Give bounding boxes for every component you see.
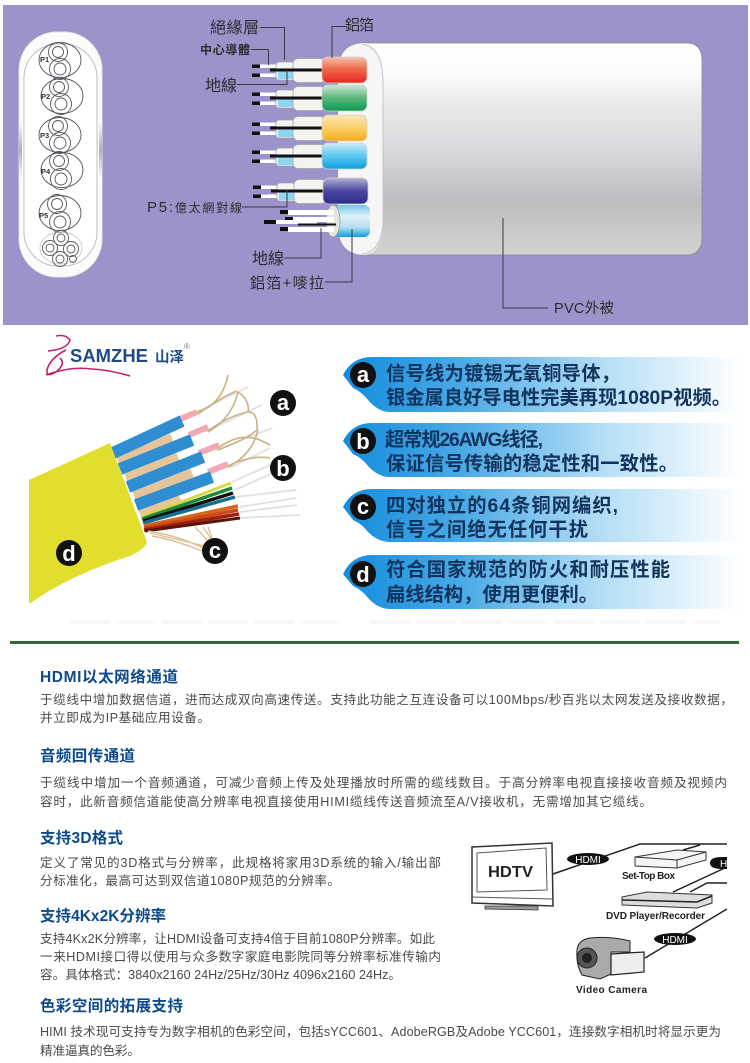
feature callout a: 银金属良好导电性完美再现1080P视频。 (386, 386, 731, 409)
HDMI device connection diagram (472, 843, 727, 996)
section: audio return channel: 于缆线中增加一个音频通道，可减少音频上传及处理播放时所需的缆线数目。于高分辨率电视直接接收音频及视频内 (40, 775, 727, 790)
HDMI badge 3 (654, 933, 696, 946)
wire pair: yellow (252, 115, 367, 141)
badge markers on cable: a (277, 390, 290, 415)
callout labels: P5:億太網對線 (147, 199, 242, 216)
cross-section capsule: P4 (41, 167, 51, 176)
badge markers on cable: b (276, 456, 290, 481)
callout labels: 鋁箔 (345, 17, 374, 34)
callout labels: 絕緣層 (210, 19, 259, 37)
wire pair: blue (252, 143, 367, 169)
cables (553, 844, 727, 958)
section: 4K x 2K resolution: 支持4Kx2K分辨率，让HDMI设备可支持4倍于目前1080P分辨率。如此 (40, 931, 435, 946)
HDMI badge 3: HDMI (662, 935, 688, 946)
bare white conductors (190, 387, 300, 518)
callout labels: 地線 (205, 77, 237, 95)
flat cable illustration (29, 375, 300, 604)
feature callout d: 扁线结构，使用更便利。 (386, 584, 598, 606)
HDMI badge 1 (567, 853, 609, 866)
feature callout d: 符合国家规范的防火和耐压性能 (386, 558, 670, 581)
section: audio return channel: 容时，此新音频信道能使高分辨率电视直接使用HIMI缆线传送音频流至A/V接收机，无需增加其它缆线。 (40, 794, 652, 809)
HDTV: HDTV (488, 864, 533, 881)
wire pair: red (252, 57, 367, 83)
wire pair: purple ethernet (253, 178, 368, 204)
feature callout d (343, 555, 742, 609)
section: 3D format (40, 828, 441, 888)
section: 3D format: 定义了常见的3D格式与分辨率，此规格将家用3D系统的输入/输出部 (40, 855, 441, 870)
callout labels: PVC外被 (554, 300, 614, 317)
section: 4K x 2K resolution (40, 906, 441, 982)
feature callout b: 保证信号传输的稳定性和一致性。 (386, 452, 678, 475)
panel: brand and flat cable (29, 336, 720, 622)
pink wire tips (178, 412, 228, 472)
callout labels: 中心導體 (200, 42, 250, 57)
HDMI badge 2, clipped: H (720, 859, 727, 870)
set-top box: Set-Top Box (622, 871, 675, 882)
section: HDMI ethernet channel: 于缆线中增加数据信道，进而达成双向高速传送。支持此功能之互连设备可以100Mbps/秒百兆以太网发送及接收数据， (40, 692, 733, 707)
badge markers on cable: c (209, 538, 221, 563)
cross-section capsule: P1 (40, 55, 49, 64)
logo: SAMZHE: 山泽 (155, 349, 184, 366)
video camera (576, 937, 647, 996)
DVD player (606, 892, 712, 922)
panel: cable cross-section diagram (3, 5, 748, 325)
blue tubes (113, 421, 212, 505)
section: color space support: HIMI 技术现可支持专为数字相机的色彩空间，包括sYCC601、AdobeRGB及Adobe YCC601，连接数字相机时将显示更为 (40, 1024, 721, 1039)
callout labels (147, 17, 614, 317)
faint caption row (70, 620, 720, 624)
cross-section capsule: P3 (40, 131, 49, 140)
section: 4K x 2K resolution: 容。具体格式：3840x2160 24Hz/25Hz/30Hz 4096x2160 24Hz。 (40, 967, 401, 982)
cross-section capsule: P5 (39, 211, 48, 220)
cable outer PVC jacket (338, 43, 702, 255)
wire pair: green (252, 85, 367, 111)
coloured wires (142, 483, 240, 531)
section: color space support: 精准逼真的色彩。 (40, 1043, 140, 1058)
feature callout a (343, 357, 742, 412)
feature callout a: 信号线为镀锡无氧铜导体， (386, 363, 620, 385)
section: HDMI ethernet channel: 并立即成为IP基础应用设备。 (40, 710, 210, 725)
feature callout c: 信号之间绝无任何干扰 (386, 518, 588, 541)
badge markers on cable: d (62, 541, 76, 566)
section: 4K x 2K resolution: 一来HDMI接口得以使用与众多数字家庭电影院同等分辨率标准传输内 (40, 949, 441, 964)
feature callout c: 四对独立的64条铜网编织, (386, 494, 618, 517)
HDTV (472, 843, 553, 910)
section: audio return channel (40, 746, 727, 809)
braided shields (118, 438, 192, 514)
leader lines (237, 26, 548, 308)
section: HDMI ethernet channel (40, 667, 733, 725)
set-top box (622, 850, 706, 882)
cross-section capsule (19, 32, 102, 277)
feature callout b: b (356, 429, 370, 454)
HDMI badge 1: HDMI (575, 855, 601, 866)
section: 3D format: 分标准化，最高可达到双信道1080P规范的分辨率。 (40, 873, 340, 888)
copper braid tails (148, 527, 212, 552)
feature callout a: a (357, 362, 370, 387)
wire bundle: foil and mylar (264, 205, 370, 237)
feature callout c (343, 489, 742, 542)
section: color space support: 色彩空间的拓展支持 (40, 996, 183, 1015)
badge markers on cable (56, 390, 296, 566)
video camera: Video Camera (576, 985, 647, 996)
callout labels: 鋁箔+嘜拉 (250, 275, 324, 292)
section: HDMI ethernet channel: HDMI以太网络通道 (40, 667, 178, 686)
section: color space support (40, 996, 721, 1058)
DVD player: DVD Player/Recorder (606, 911, 705, 922)
feature callout c: c (357, 494, 369, 519)
section: audio return channel: 音频回传通道 (40, 746, 135, 765)
feature callout d: d (356, 562, 370, 587)
logo: SAMZHE: ® (184, 342, 190, 351)
section: 4K x 2K resolution: 支持4Kx2K分辨率 (40, 906, 166, 925)
logo: SAMZHE: SAMZHE (70, 346, 148, 366)
logo: SAMZHE (46, 336, 190, 376)
HDMI badge 2, clipped (710, 857, 727, 870)
callout labels: 地線 (252, 250, 284, 268)
yellow jacket (29, 443, 147, 604)
feature callout b: 超常规26AWG线径, (385, 429, 543, 451)
section: 3D format: 支持3D格式 (40, 828, 123, 847)
cross-section capsule: P2 (41, 92, 50, 101)
copper drain wires (197, 375, 270, 467)
feature callout b (343, 423, 742, 477)
